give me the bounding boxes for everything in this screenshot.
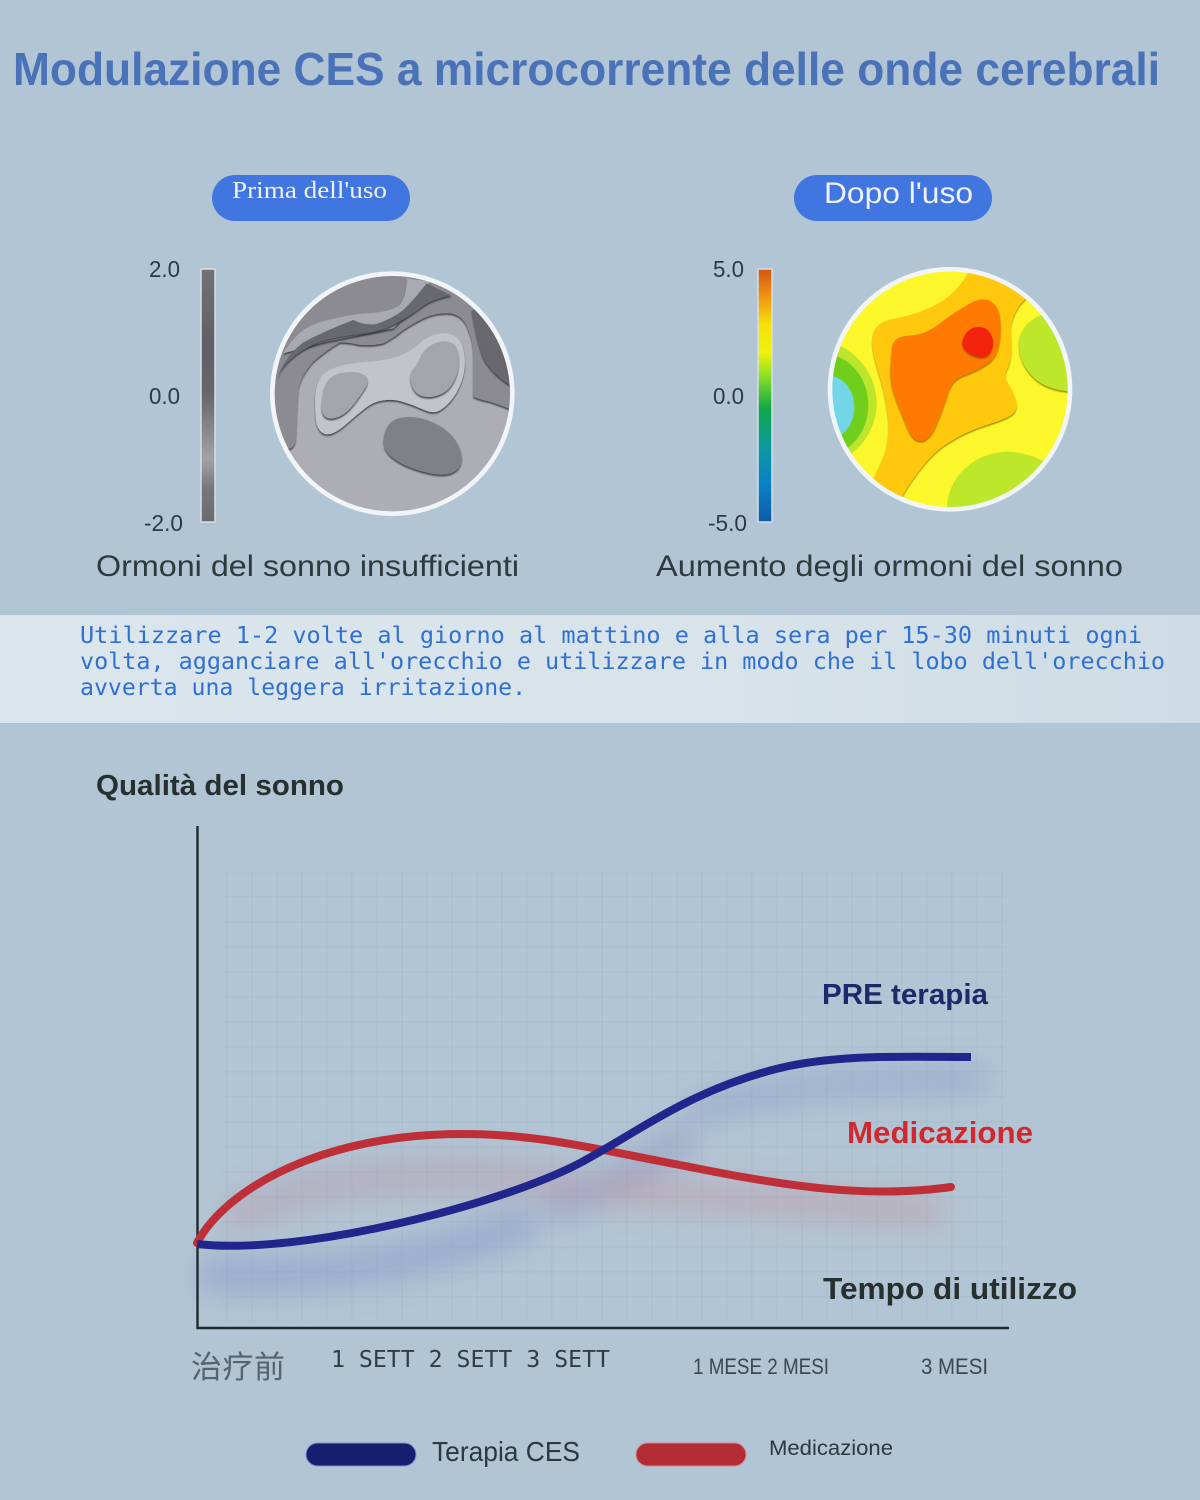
- brain map: after use: [828, 267, 1072, 512]
- x axis labels: 1 MESE 2 MESI: [693, 1354, 829, 1379]
- curve: medication: [197, 1134, 951, 1243]
- grey colour scale: [144, 256, 215, 536]
- panel: after use: [656, 175, 1123, 583]
- legend: [306, 1436, 893, 1467]
- grey colour scale: -2.0: [144, 510, 183, 536]
- instructions band: Utilizzare 1-2 volte al giorno al mattino e alla sera per 15-30 minuti ogni: [80, 623, 1142, 649]
- curve glows: [215, 1080, 975, 1276]
- x axis title: Tempo di utilizzo: [823, 1271, 1077, 1306]
- legend: medication: Medicazione: [769, 1437, 893, 1460]
- badge: after use: Dopo l'uso: [824, 177, 973, 210]
- brain map: before use: [270, 271, 515, 516]
- instructions band: volta, agganciare all'orecchio e utilizzare in modo che il lobo dell'orecchio: [80, 649, 1165, 675]
- rainbow colour scale: 5.0: [713, 256, 744, 282]
- badge: after use: [794, 175, 992, 221]
- rainbow colour scale: [708, 256, 772, 536]
- curve label: medication: Medicazione: [847, 1115, 1033, 1150]
- curve: CES therapy: [197, 1057, 971, 1246]
- x axis labels: 1 SETT 2 SETT 3 SETT: [331, 1347, 610, 1373]
- x axis labels: 3 MESI: [921, 1354, 988, 1379]
- legend: CES therapy: Terapia CES: [432, 1436, 580, 1467]
- axes: [198, 826, 1009, 1328]
- title: Modulazione CES a microcorrente delle onde cerebrali: [13, 43, 1160, 95]
- rainbow colour scale: -5.0: [708, 510, 747, 536]
- x axis labels: 治疗前: [191, 1350, 285, 1385]
- rainbow colour scale: 0.0: [713, 383, 744, 409]
- instructions band: [0, 615, 1200, 723]
- y axis title: Qualità del sonno: [96, 770, 344, 802]
- panel: sleep quality chart: [96, 770, 1077, 1385]
- curve label: CES: PRE terapia: [822, 979, 989, 1011]
- caption: before use: Ormoni del sonno insufficienti: [96, 550, 519, 583]
- badge: before use: Prima dell'uso: [232, 178, 387, 204]
- x axis labels: [191, 1347, 988, 1385]
- chart grid: [222, 872, 1006, 1322]
- grey colour scale: 2.0: [149, 256, 180, 282]
- legend: CES therapy: [306, 1436, 580, 1467]
- grey colour scale: 0.0: [149, 383, 180, 409]
- instructions band: avverta una leggera irritazione.: [80, 675, 526, 701]
- panel: before use: [96, 175, 527, 583]
- badge: before use: [212, 175, 410, 221]
- caption: after use: Aumento degli ormoni del sonno: [656, 550, 1123, 583]
- legend: medication: [636, 1437, 893, 1466]
